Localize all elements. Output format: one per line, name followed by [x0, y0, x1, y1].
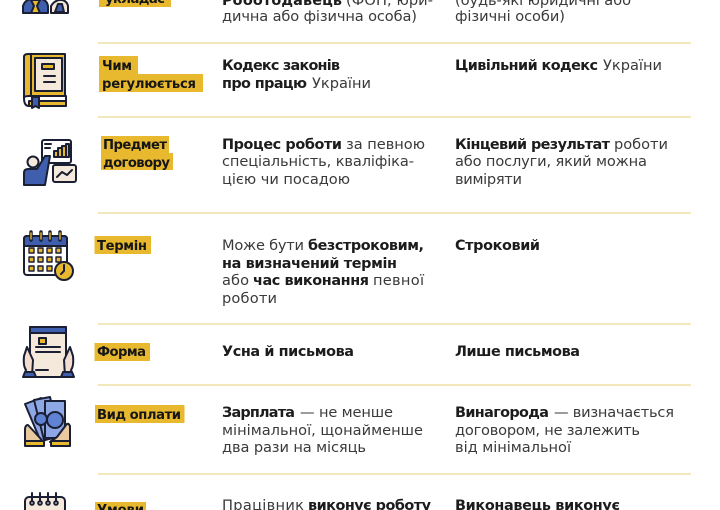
text: remuneration: від мінімальної	[455, 439, 572, 456]
text: work process: за певною	[346, 136, 425, 153]
text: salary: — не менше	[300, 404, 393, 421]
label: payment type: Вид оплати	[97, 408, 181, 423]
text: work process: Процес роботи	[222, 137, 342, 153]
text: work process: цією чи посадою	[222, 171, 350, 188]
label: regulated by	[99, 56, 203, 92]
text: indefinite term: або	[222, 272, 249, 289]
row: form	[23, 327, 580, 377]
text: labour code	[222, 58, 371, 92]
text: written only: Лише письмова	[455, 344, 580, 360]
icon: hands holding banknotes	[25, 397, 70, 446]
text: indefinite term: роботи	[222, 290, 277, 307]
text: remuneration	[455, 404, 674, 456]
row: payment type	[25, 397, 674, 456]
label: form: Форма	[97, 345, 146, 360]
text: contractor party: фізичні особи)	[455, 8, 565, 25]
row: regulated by	[24, 54, 662, 108]
text: end result: Кінцевий результат	[455, 137, 611, 153]
text: civil code: Цивільний кодекс	[455, 58, 598, 74]
label: regulated by: Чим	[102, 59, 132, 74]
label: regulated by: регулюється	[102, 77, 196, 92]
label: subject of contract: Предмет	[103, 138, 167, 153]
text: salary	[222, 404, 423, 456]
row: subject of contract	[24, 136, 668, 188]
text: indefinite term: певної	[373, 272, 425, 289]
label: subject of contract: договору	[103, 156, 170, 171]
label: term: Термін	[97, 239, 147, 254]
icon: notepad	[25, 493, 65, 510]
text: end result: роботи	[614, 136, 668, 153]
text: oral and written: Усна й письмова	[222, 344, 354, 360]
text: work process	[222, 136, 425, 188]
icon: calendar with clock	[24, 232, 73, 280]
text: indefinite term: на визначений термін	[222, 256, 397, 272]
icon: presenter with charts	[24, 140, 76, 185]
icon: law book	[24, 54, 66, 108]
row: conditions	[25, 493, 620, 510]
text: employer: дична або фізична особа)	[222, 8, 417, 25]
text: remuneration: — визначається	[554, 404, 674, 421]
text: salary: два рази на місяць	[222, 439, 366, 456]
text: civil code: України	[603, 57, 662, 74]
text: end result	[455, 136, 668, 188]
text: salary: мінімальної, щонайменше	[222, 422, 423, 439]
row: who concludes	[23, 0, 631, 25]
row: term	[24, 232, 540, 307]
text: labour code: про працю	[222, 76, 307, 92]
text: work process: спеціальність, кваліфіка-	[222, 153, 414, 170]
text: end result: або послуги, який можна	[455, 153, 647, 170]
text: fixed term: Строковий	[455, 238, 540, 254]
text: indefinite term: безстроковим,	[308, 238, 424, 254]
text: indefinite term: час виконання	[253, 273, 369, 289]
text: end result: виміряти	[455, 171, 522, 188]
text: labour code: Кодекс законів	[222, 58, 340, 74]
text: salary: Зарплата	[222, 405, 295, 421]
icon: people	[23, 0, 68, 13]
icon: hands holding document	[23, 327, 74, 377]
text: contractor party	[455, 0, 631, 25]
text: indefinite term: Може бути	[222, 237, 304, 254]
text: labour code: України	[312, 75, 371, 92]
text: remuneration: договором, не залежить	[455, 422, 640, 439]
text: remuneration: Винагорода	[455, 405, 549, 421]
text: employer	[222, 0, 433, 25]
text: indefinite term	[222, 237, 425, 307]
label: subject of contract	[101, 136, 173, 171]
text: employee performs work	[222, 497, 432, 510]
text: civil code	[455, 57, 662, 74]
